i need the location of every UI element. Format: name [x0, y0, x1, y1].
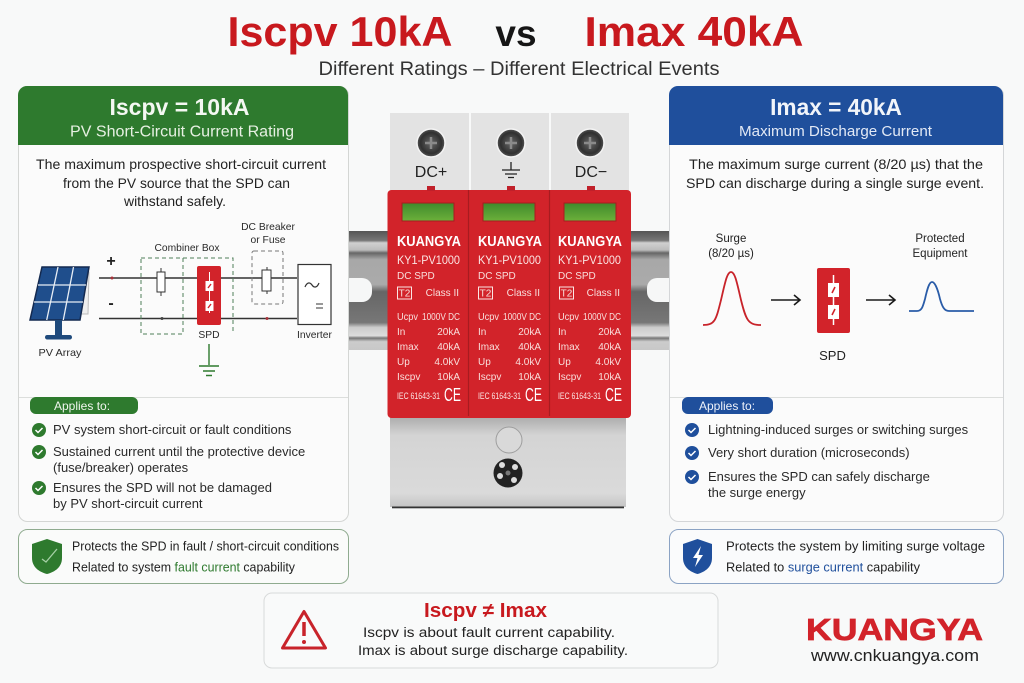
polarity marks: +: [106, 253, 116, 270]
title: Iscpv 10kA: [228, 8, 452, 55]
SPD symbol: [197, 266, 221, 341]
module 1 labels: In: [397, 327, 405, 338]
callout: fault protection: Protects the SPD in fault / short-circuit conditions: [72, 540, 339, 554]
applies to list: Very short duration (microseconds): [708, 445, 910, 460]
logo: KUANGYA: KUANGYA: [806, 612, 983, 647]
inverter: [297, 264, 333, 341]
SPD device: [388, 113, 631, 508]
DC breaker or fuse: DC Breaker: [241, 222, 295, 233]
module 2 labels: 20kA: [518, 327, 541, 338]
module 2 labels: CE: [525, 385, 542, 405]
definition text: withstand safely.: [123, 193, 226, 209]
callout: comparison note: Imax is about surge discharge capability.: [358, 643, 628, 659]
module 3 labels: KUANGYA: [558, 233, 622, 250]
module 2 labels: 1000V DC: [503, 312, 541, 323]
module 3 labels: 10kA: [598, 372, 621, 383]
title: [228, 8, 804, 55]
module 3 labels: Iscpv: [558, 372, 581, 383]
module 1 labels: IEC 61643-31: [397, 391, 440, 401]
panel header: Imax: Imax = 40kA: [770, 94, 902, 120]
module 1 labels: [397, 233, 461, 405]
polarity marks: [106, 253, 116, 312]
applies to list: [682, 397, 969, 500]
arrow: [866, 295, 895, 305]
divider: [670, 396, 1003, 398]
module 3 labels: IEC 61643-31: [558, 391, 601, 401]
red modules: [388, 186, 631, 418]
module 1 labels: DC SPD: [397, 271, 435, 282]
module 2 labels: Imax: [478, 342, 500, 353]
divider: [19, 396, 348, 398]
applies to list: Applies to:: [699, 399, 755, 413]
title: vs: [495, 13, 537, 54]
module 1 labels: 4.0kV: [434, 357, 460, 368]
title: Imax 40kA: [584, 8, 804, 55]
panel: Imax: [669, 86, 1004, 522]
callout: surge protection: [670, 530, 1004, 584]
definition text: SPD can discharge during a single surge event.: [686, 175, 984, 191]
terminal tops: DC+: [415, 164, 447, 181]
protected equipment label: Protected: [915, 233, 965, 245]
DC breaker or fuse: [241, 222, 295, 304]
icon: solar panel: [30, 267, 89, 340]
module 3 labels: Up: [558, 357, 571, 368]
module 1 labels: Imax: [397, 342, 419, 353]
module 3 labels: 20kA: [598, 327, 621, 338]
module 1 labels: 1000V DC: [422, 312, 460, 323]
applies to list: Ensures the SPD will not be damaged: [53, 480, 272, 495]
icon: SPD: SPD: [819, 348, 846, 363]
module 2 labels: 4.0kV: [515, 357, 541, 368]
applies to list: PV system short-circuit or fault conditions: [53, 422, 292, 437]
module 1 labels: CE: [444, 385, 461, 405]
module 2 labels: 10kA: [518, 372, 541, 383]
module 1 labels: 40kA: [437, 342, 460, 353]
device base: [390, 415, 626, 508]
module 3 labels: In: [558, 327, 566, 338]
ground symbol: [199, 344, 219, 376]
applies to list: Ensures the SPD can safely discharge: [708, 469, 930, 484]
callout: surge protection: Protects the system by limiting surge voltage: [726, 540, 985, 554]
subtitle: Different Ratings – Different Electrical Events: [318, 58, 720, 80]
definition text: [36, 156, 326, 209]
module 2 labels: Class II: [507, 288, 540, 299]
module 1 labels: KUANGYA: [397, 233, 461, 250]
definition text: from the PV source that the SPD can: [63, 175, 290, 191]
module 2 labels: T2: [480, 288, 492, 300]
module 3 labels: Class II: [587, 288, 620, 299]
applies to list: the surge energy: [708, 485, 806, 500]
protected equipment label: Equipment: [913, 248, 968, 260]
module 2 labels: DC SPD: [478, 271, 516, 282]
arrow: [771, 295, 800, 305]
protected equipment label: [913, 233, 968, 260]
callout: fault protection: Related to system fault current capability: [72, 560, 296, 574]
module 3 labels: KY1-PV1000: [558, 255, 621, 267]
module 1 labels: Iscpv: [397, 372, 420, 383]
module 1 labels: Class II: [426, 288, 459, 299]
module 3 labels: 40kA: [598, 342, 621, 353]
module 1 labels: 10kA: [437, 372, 460, 383]
module 3 labels: Imax: [558, 342, 580, 353]
combiner box: [141, 243, 233, 334]
module 1 labels: Up: [397, 357, 410, 368]
icon: green shield: [32, 539, 62, 574]
definition text: The maximum surge current (8/20 µs) that the: [689, 156, 983, 172]
module 3 labels: DC SPD: [558, 271, 596, 282]
inverter: Inverter: [297, 330, 333, 341]
applies to list: Lightning-induced surges or switching surges: [708, 422, 969, 437]
module 3 labels: CE: [605, 385, 622, 405]
definition text: The maximum prospective short-circuit current: [36, 156, 326, 172]
module 2 labels: Ucpv: [478, 312, 499, 323]
module 1 labels: KY1-PV1000: [397, 255, 460, 267]
applies to list: (fuse/breaker) operates: [53, 460, 189, 475]
terminal tops: DC−: [575, 164, 607, 181]
applies to list: Applies to:: [54, 399, 110, 413]
module 2 labels: Iscpv: [478, 372, 501, 383]
panel header: Imax: Maximum Discharge Current: [739, 123, 933, 140]
applies to list: Sustained current until the protective device: [53, 444, 305, 459]
DIN rail: [340, 231, 679, 350]
module 3 labels: [558, 233, 622, 405]
callout: comparison note: Iscpv is about fault current capability.: [363, 625, 615, 641]
callout: comparison note: Iscpv ≠ Imax: [424, 600, 547, 622]
surge label: (8/20 µs): [708, 248, 754, 260]
module 3 labels: 1000V DC: [583, 312, 621, 323]
chart: clamped waveform: [909, 282, 974, 311]
panel header: Imax: [669, 86, 1003, 145]
surge label: Surge: [716, 233, 746, 245]
module 2 labels: Up: [478, 357, 491, 368]
panel: Iscpv: [18, 86, 348, 522]
icon: SPD: [817, 268, 850, 363]
module 2 labels: In: [478, 327, 486, 338]
panel header: Iscpv: PV Short-Circuit Current Rating: [70, 124, 294, 140]
module 2 labels: IEC 61643-31: [478, 391, 521, 401]
surge label: [708, 233, 754, 260]
definition text: [686, 156, 984, 191]
module 1 labels: T2: [399, 288, 411, 300]
module 1 labels: 20kA: [437, 327, 460, 338]
panel header: Iscpv: Iscpv = 10kA: [109, 94, 250, 120]
polarity marks: -: [108, 295, 114, 312]
callout: comparison note: [264, 593, 718, 668]
PV array label: PV Array: [38, 348, 82, 359]
module 2 labels: [478, 233, 542, 405]
applies to list: [30, 397, 305, 511]
panel header: Iscpv: [18, 86, 348, 145]
wire junction dots: [110, 276, 268, 320]
module 3 labels: Ucpv: [558, 312, 579, 323]
module 2 labels: 40kA: [518, 342, 541, 353]
module 1 labels: Ucpv: [397, 312, 418, 323]
logo: KUANGYA: www.cnkuangya.com: [810, 647, 979, 665]
DC breaker or fuse: or Fuse: [251, 235, 286, 246]
chart: surge waveform: [703, 272, 761, 325]
terminal tops: [390, 113, 629, 191]
applies to list: by PV short-circuit current: [53, 496, 203, 511]
logo: KUANGYA: [806, 612, 983, 665]
module 2 labels: KUANGYA: [478, 233, 542, 250]
module 3 labels: 4.0kV: [595, 357, 621, 368]
wires: [99, 278, 297, 318]
icon: blue shield: [683, 539, 712, 574]
callout: fault protection: [18, 530, 348, 584]
module 3 labels: T2: [561, 288, 573, 300]
module 2 labels: KY1-PV1000: [478, 255, 541, 267]
diagram: surge path: [703, 233, 974, 363]
icon: warning triangle: [282, 612, 326, 648]
SPD symbol: SPD: [198, 330, 220, 341]
combiner box: Combiner Box: [154, 243, 220, 254]
diagram: PV circuit: [30, 222, 333, 376]
callout: surge protection: Related to surge current capability: [726, 560, 921, 574]
